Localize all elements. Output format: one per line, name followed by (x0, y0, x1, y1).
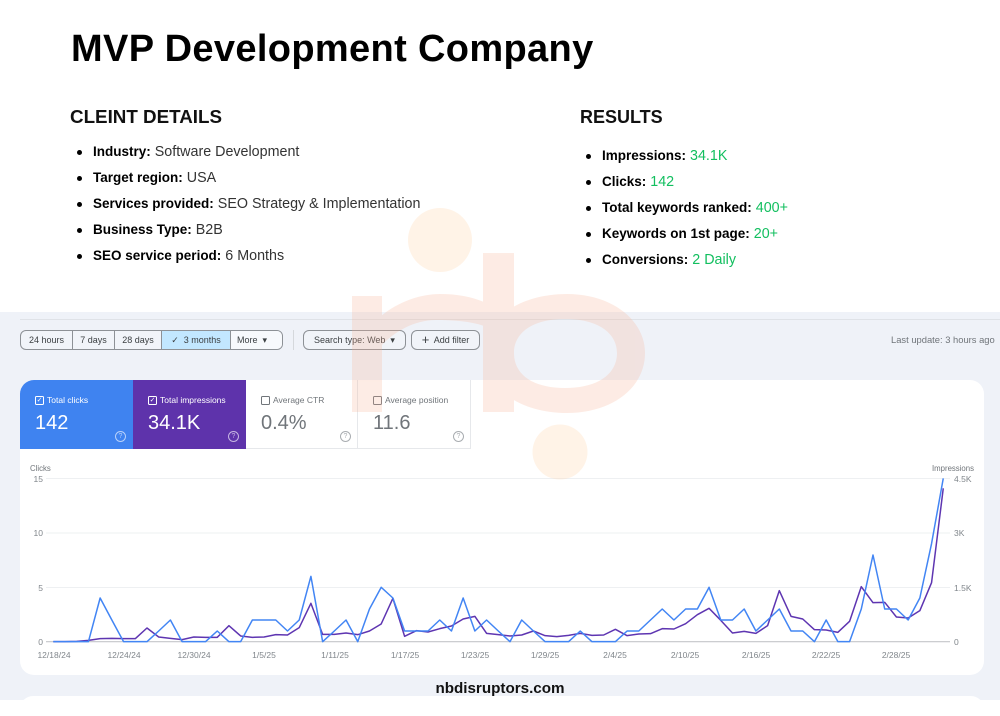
metric tiles: Average position (385, 395, 448, 405)
left axis labels: Clicks (30, 464, 51, 473)
date axis labels: 12/24/24 (107, 650, 141, 660)
metric tiles: ? (344, 433, 347, 440)
metric tiles: ? (232, 433, 235, 440)
metric tiles: 142 (35, 412, 68, 434)
date axis labels: 1/23/25 (461, 650, 489, 660)
date axis labels (37, 650, 910, 660)
date axis labels: 12/30/24 (177, 650, 211, 660)
right axis labels (932, 464, 974, 647)
metric tiles: 11.6 (373, 412, 410, 434)
date axis labels: 2/28/25 (882, 650, 910, 660)
metric tiles: Total impressions (160, 395, 226, 405)
list: results: Keywords on 1st page: 20+ (602, 226, 778, 242)
toolbar: date range filter and search filters: Search type: Web ▾ (314, 335, 395, 345)
clicks line (53, 478, 943, 642)
metric tiles: 0.4% (261, 412, 307, 434)
left axis labels: 15 (34, 474, 43, 484)
date axis labels: 1/17/25 (391, 650, 419, 660)
right axis labels: 0 (954, 637, 959, 647)
list: results: Clicks: 142 (602, 174, 674, 190)
metric tiles: ✓ (150, 397, 155, 404)
toolbar: date range filter and search filters: 28 days (122, 335, 154, 345)
left axis labels: 0 (38, 637, 43, 647)
toolbar: date range filter and search filters: ✓ 3 months (171, 335, 221, 345)
date axis labels: 2/22/25 (812, 650, 840, 660)
metric tiles: Average CTR (273, 395, 324, 405)
chart card (20, 380, 984, 675)
metric tiles: 34.1K (148, 412, 200, 434)
right axis labels: 1.5K (954, 583, 972, 593)
date axis labels: 2/10/25 (671, 650, 699, 660)
date axis labels: 1/11/25 (321, 650, 349, 660)
toolbar: date range filter and search filters: More ▾ (237, 335, 267, 345)
toolbar: date range filter and search filters: + Add filter (422, 332, 469, 347)
right axis labels: 4.5K (954, 474, 972, 484)
list: client details: SEO service period: 6 Months (93, 248, 284, 264)
heading: results: RESULTS (580, 107, 663, 127)
metric tiles: ? (457, 433, 460, 440)
left axis labels: 10 (34, 528, 43, 538)
list: client details: Business Type: B2B (93, 222, 223, 238)
toolbar: date range filter and search filters: 7 days (80, 335, 107, 345)
list: client details: Industry: Software Development (93, 144, 299, 160)
metric tiles: ? (119, 433, 122, 440)
next card edge (20, 696, 984, 716)
left axis labels (30, 464, 51, 647)
toolbar: date range filter and search filters: Last update: 3 hours ago (891, 334, 995, 345)
metric tiles: Total clicks (47, 395, 88, 405)
date axis labels: 2/16/25 (742, 650, 770, 660)
date axis labels: 12/18/24 (37, 650, 71, 660)
date axis labels: 2/4/25 (603, 650, 627, 660)
metric tiles: ✓ (37, 397, 42, 404)
impressions line (53, 488, 943, 642)
list: client details: Services provided: SEO Strategy & Implementation (93, 196, 420, 212)
date axis labels: 1/5/25 (252, 650, 276, 660)
toolbar: date range filter and search filters: 24 hours (29, 335, 64, 345)
left axis labels: 5 (38, 583, 43, 593)
title: MVP Development Company (71, 28, 594, 70)
list: client details: Target region: USA (93, 170, 216, 186)
heading: client details: CLEINT DETAILS (70, 106, 222, 127)
list: results (586, 148, 788, 268)
toolbar: date range filter and search filters (20, 319, 1000, 350)
right axis labels: Impressions (932, 464, 974, 473)
right axis labels: 3K (954, 528, 965, 538)
list: results: Total keywords ranked: 400+ (602, 200, 788, 216)
footer website label: nbdisruptors.com (435, 680, 565, 697)
list: results: Impressions: 34.1K (602, 148, 727, 164)
list: client details (77, 144, 420, 264)
date axis labels: 1/29/25 (531, 650, 559, 660)
dashboard background panel (0, 312, 1000, 700)
list: results: Conversions: 2 Daily (602, 252, 736, 268)
metric tiles (20, 380, 471, 449)
